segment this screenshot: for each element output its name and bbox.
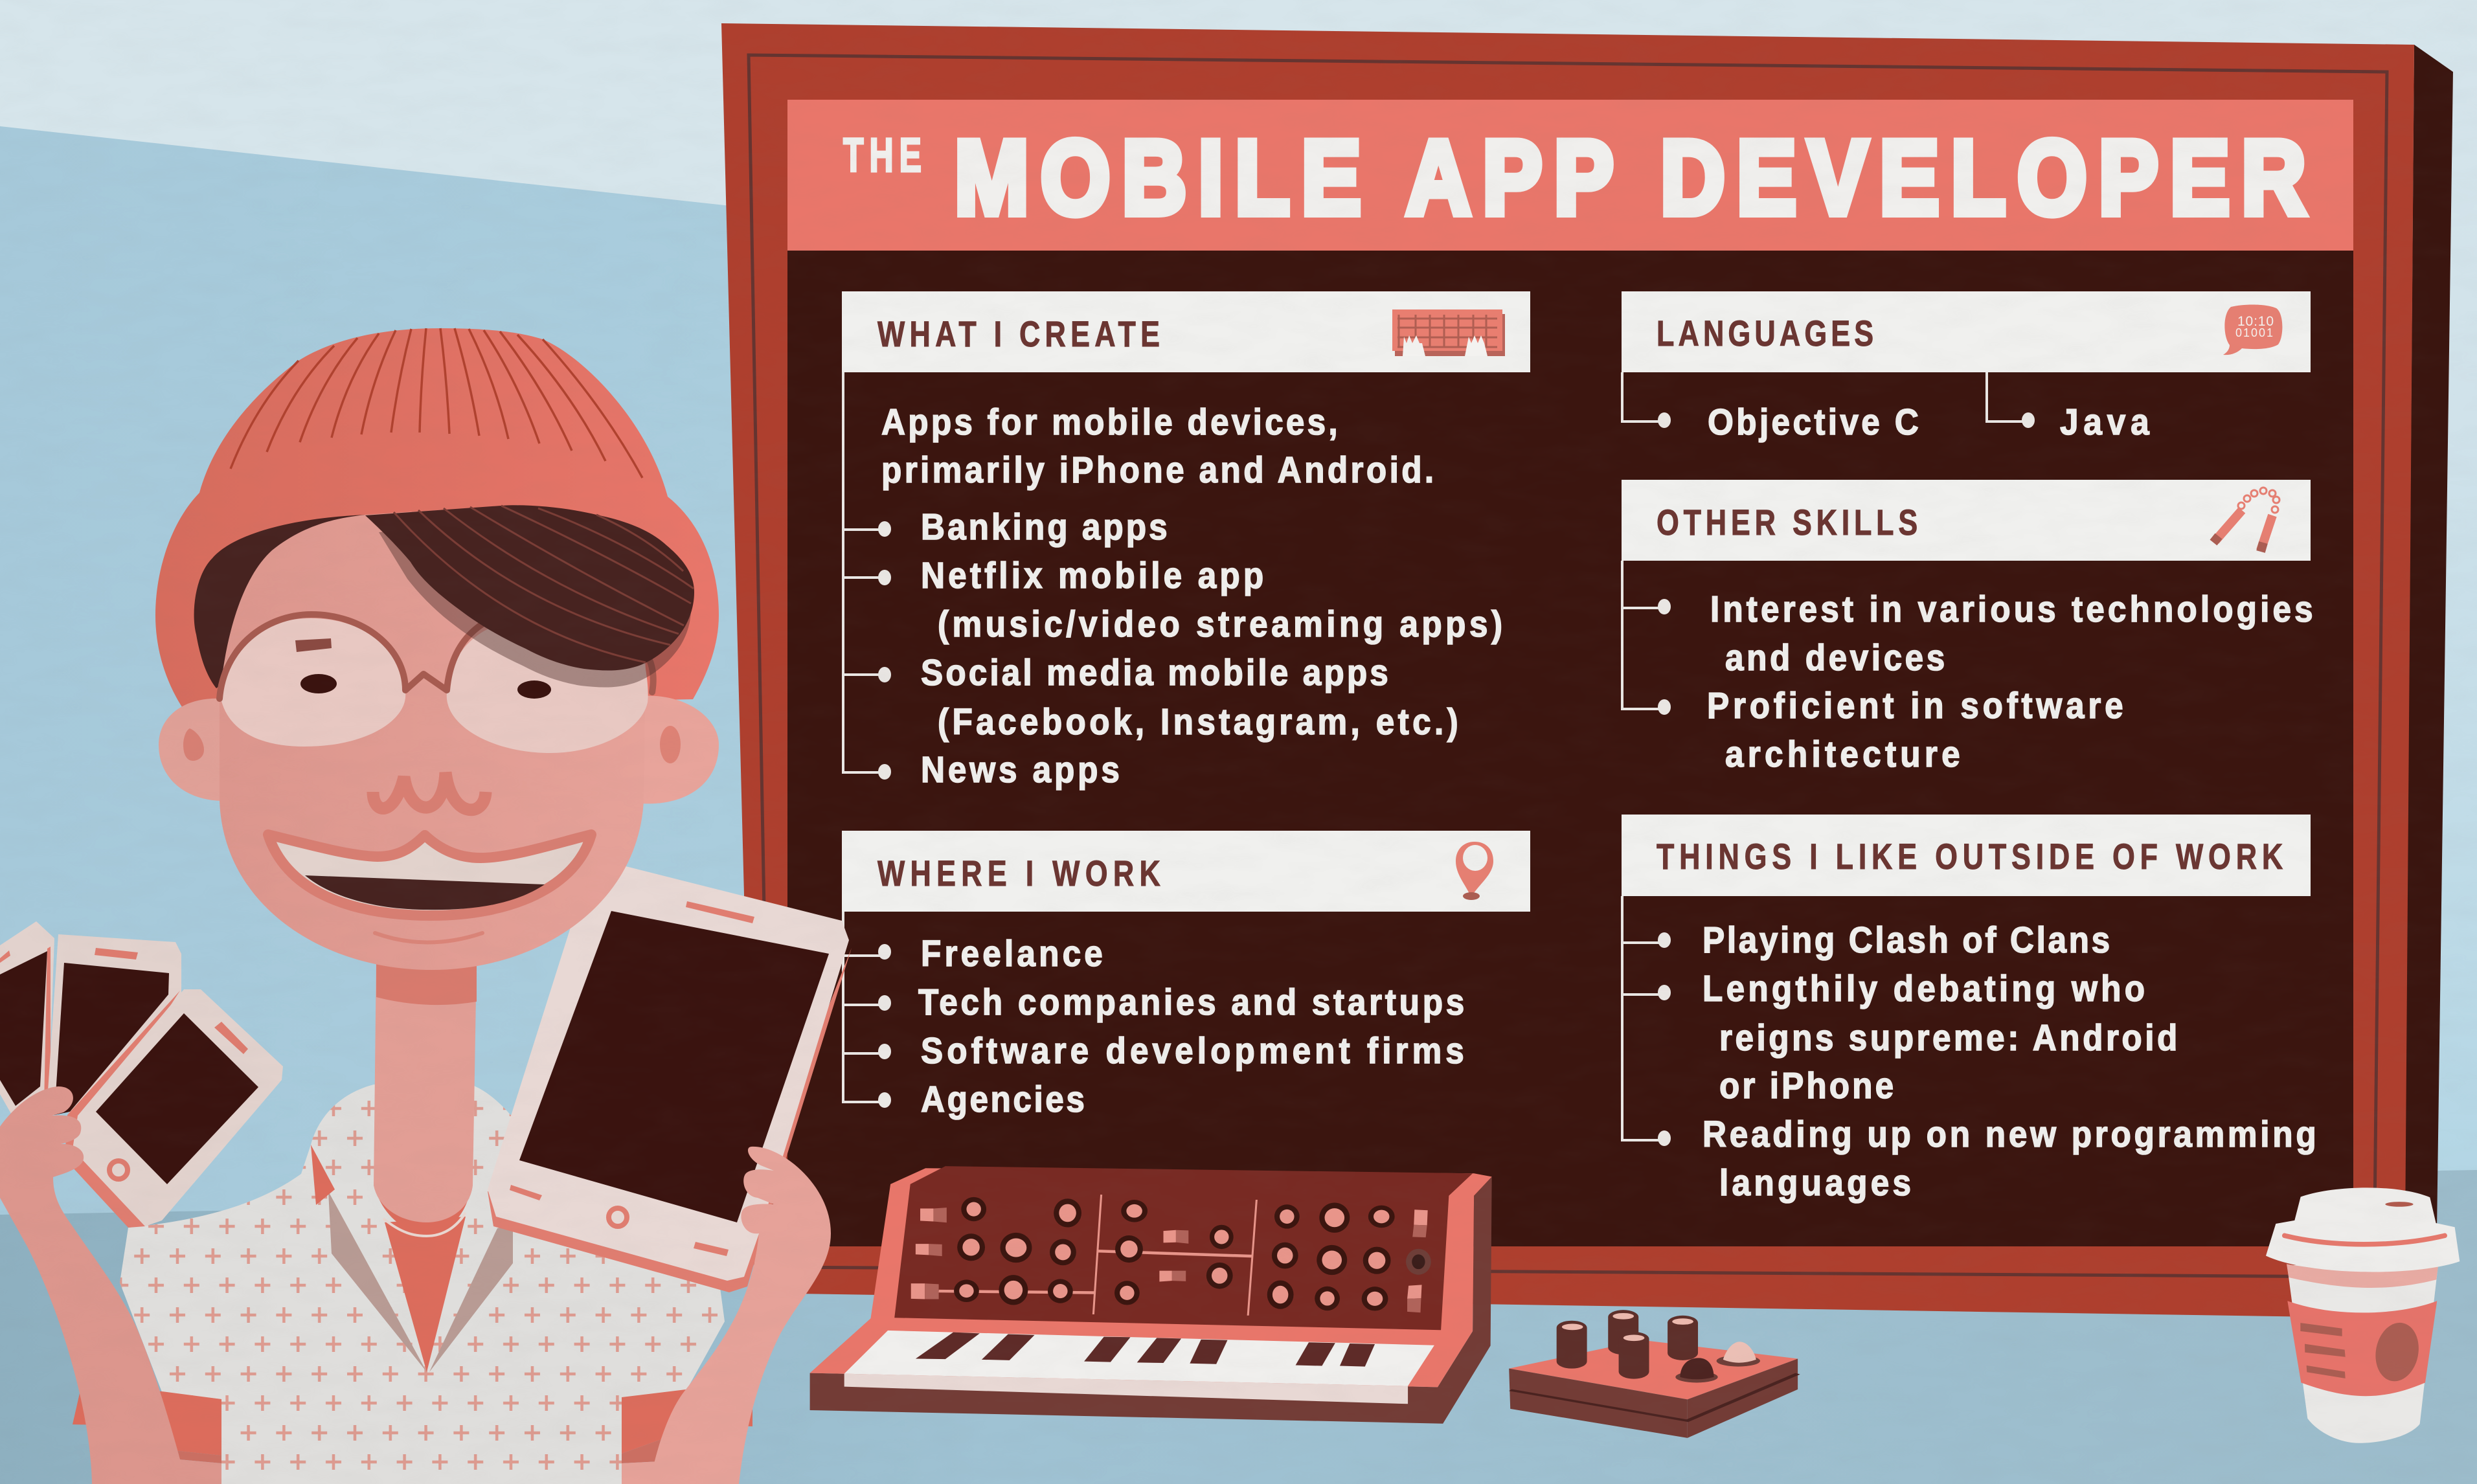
tablet speaker (686, 901, 754, 923)
bullet dots (1658, 412, 2035, 428)
cup body (2287, 1265, 2438, 1443)
body text: Playing Clash of Clans (1702, 920, 2110, 961)
chin line (375, 933, 482, 943)
right arm and hand (650, 1147, 831, 1484)
keyboard black keys (916, 1332, 1375, 1367)
background upper light wall (0, 0, 2477, 396)
sleeve label lines (2300, 1323, 2346, 1378)
body text: (Facebook, Instagram, etc.) (938, 702, 1458, 743)
body text: Lengthily debating who (1702, 969, 2145, 1009)
panel: things I like outside of work (1622, 815, 2316, 1204)
collar V (385, 1217, 466, 1372)
panel: what I create (842, 291, 1530, 791)
heading: WHAT I CREATE (877, 313, 1160, 354)
body text: Netflix mobile app (921, 556, 1263, 596)
body text: Software development firms (921, 1031, 1464, 1072)
title banner (787, 100, 2353, 251)
box left face (1509, 1369, 1688, 1438)
bullet dots (1658, 932, 1671, 1146)
cup sleeve (2287, 1301, 2437, 1396)
bullet dots (878, 944, 891, 1108)
neck (374, 958, 477, 1222)
frame side (2404, 45, 2453, 1246)
connector lines (1622, 561, 1664, 709)
necklace line (383, 1213, 466, 1236)
frame front (721, 23, 2414, 1318)
tablet edge (488, 948, 852, 1292)
heading: OTHER SKILLS (1657, 502, 1917, 543)
hair fringe (365, 505, 694, 671)
connector lines (843, 912, 885, 1102)
knob caps (1562, 1313, 1693, 1341)
cup lid shadow band (2287, 1264, 2438, 1288)
lid sip hole (2385, 1202, 2414, 1207)
illustration: developer character (0, 328, 852, 1484)
sleeve logo (2371, 1318, 2424, 1386)
illustration: coffee cup (2266, 1187, 2460, 1443)
hair shadow (379, 522, 691, 688)
face (220, 505, 648, 970)
box right face (1688, 1358, 1798, 1438)
eyebrow (295, 638, 332, 652)
bullet dots (878, 521, 891, 780)
body text: Agencies (921, 1079, 1085, 1120)
tablet (488, 858, 852, 1292)
tablet screen (519, 911, 829, 1222)
body text: Banking apps (921, 507, 1168, 548)
body text (918, 934, 1464, 1120)
header bar (842, 831, 1530, 912)
title: THE (843, 128, 922, 182)
icon: map pin (1456, 842, 1493, 900)
body text: Social media mobile apps (921, 653, 1388, 693)
tablet home button (609, 1208, 627, 1226)
connector lines (843, 372, 885, 772)
hat ribs (231, 328, 642, 478)
lid groove (2285, 1235, 2445, 1244)
hair left (194, 515, 365, 688)
keyboard white keys (844, 1331, 1434, 1386)
shirt (120, 1085, 725, 1484)
frame inner line (749, 55, 2387, 1277)
connector lines (1622, 372, 2028, 422)
illustration: effects box with knobs (1509, 1310, 1798, 1438)
background right wall strip (2396, 0, 2477, 1185)
keyboard front (844, 1374, 1408, 1404)
collar shadows (328, 1191, 513, 1372)
glasses frame (220, 614, 653, 699)
bullet dots (1658, 599, 1671, 715)
body text: Tech companies and startups (918, 982, 1464, 1023)
hat (155, 328, 719, 709)
phone far left (0, 921, 54, 1117)
icon: binary speech bubble: 10:10 (2237, 314, 2274, 329)
slider switches (911, 1208, 1431, 1312)
nose (373, 772, 486, 810)
glasses lenses (220, 618, 648, 753)
control panel (894, 1166, 1473, 1330)
body text: Objective C (1708, 402, 1919, 443)
icon: keyboard with hands (1392, 309, 1505, 356)
floor (0, 1170, 2477, 1484)
body text: and devices (1725, 638, 1945, 679)
phone middle (44, 934, 181, 1115)
hair strands (394, 506, 694, 662)
tablet bottom bars (510, 1185, 542, 1200)
body text: languages (1719, 1163, 1911, 1204)
body text: reigns supreme: Android (1719, 1018, 2177, 1059)
panel dividers (939, 1195, 1256, 1316)
body text: Proficient in software (1707, 686, 2123, 726)
heading: WHERE I WORK (877, 853, 1160, 894)
tall knobs (1557, 1310, 1698, 1379)
upper arm bases below sleeves (179, 1459, 661, 1484)
body text (1707, 589, 2313, 775)
neck crescent (374, 1186, 471, 1234)
synth body (810, 1168, 1492, 1387)
sleeves (73, 1388, 752, 1463)
illustration: synthesizer (810, 1166, 1492, 1424)
heading: THINGS I LIKE OUTSIDE OF WORK (1657, 836, 2283, 877)
panel: languages (1622, 291, 2311, 443)
header bar (1622, 291, 2311, 372)
header bar (842, 291, 1530, 372)
title: MOBILE APP DEVELOPER (955, 118, 2306, 236)
header bar (1622, 480, 2311, 561)
icon: nunchucks (2213, 488, 2279, 552)
box top (1509, 1340, 1798, 1399)
body text: (music/video streaming apps) (938, 604, 1502, 645)
header bar (1622, 815, 2311, 896)
body text: News apps (921, 750, 1120, 791)
body text: architecture (1725, 734, 1960, 775)
ears (159, 696, 719, 804)
body text: or iPhone (1719, 1066, 1894, 1107)
icon: binary speech bubble: 01001 (2235, 326, 2273, 339)
body text: Interest in various technologies (1710, 589, 2313, 630)
panel: where I work (842, 831, 1530, 1120)
cone knobs (1675, 1342, 1760, 1382)
phone front (65, 989, 283, 1228)
left arm and hand (0, 1086, 187, 1484)
synth base (810, 1176, 1492, 1424)
mouth (268, 835, 591, 916)
panel: other skills (1622, 480, 2313, 775)
neck shadow band (376, 958, 477, 1005)
body text: Apps for mobile devices, (881, 402, 1338, 443)
heading: LANGUAGES (1657, 313, 1873, 354)
connector lines (1622, 896, 1664, 1140)
body text: Java (2060, 402, 2149, 443)
collar tip (311, 1145, 335, 1205)
knob caps (959, 1202, 1390, 1306)
tablet body (488, 858, 849, 1281)
board panel (787, 251, 2353, 1246)
eyes (300, 674, 551, 699)
body text (881, 402, 1502, 791)
knobs (954, 1197, 1395, 1310)
body text (1708, 402, 2149, 443)
body text: Freelance (921, 934, 1103, 974)
body text: primarily iPhone and Android. (881, 450, 1434, 491)
icon: binary speech bubble (2223, 304, 2282, 355)
board: framed sign (721, 23, 2453, 1318)
cup lid (2266, 1187, 2460, 1272)
body text: Reading up on new programming (1702, 1114, 2316, 1155)
body text (1702, 920, 2316, 1204)
